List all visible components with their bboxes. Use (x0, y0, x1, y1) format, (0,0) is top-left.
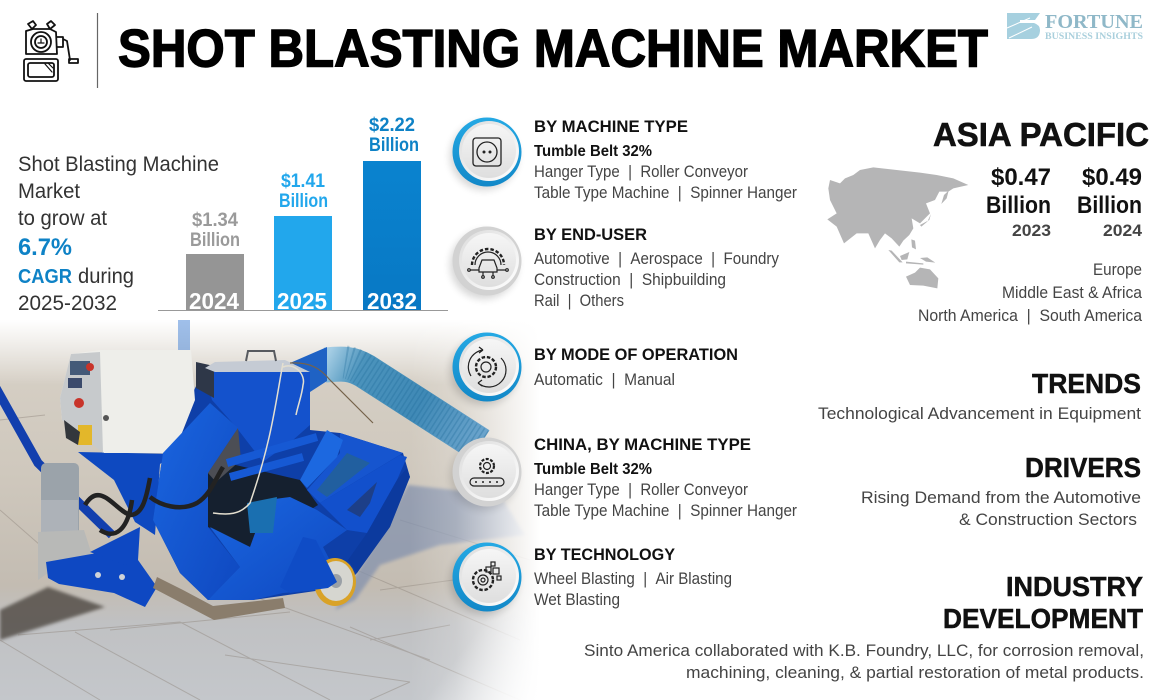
machine handle (0, 388, 112, 535)
icon: by machine type (450, 118, 522, 190)
machine body backing (153, 368, 410, 600)
carry handle (246, 351, 276, 361)
other regions list (918, 261, 1143, 325)
text: by machine type: Hanger Type | Roller Conveyor (534, 163, 748, 181)
vertical pole (178, 320, 190, 354)
value 2024 (1077, 164, 1143, 240)
text: by mode of operation (534, 345, 738, 389)
bar 2025: 2025 (277, 288, 327, 314)
other regions list: Europe (1093, 261, 1142, 279)
logo: Fortune Business Insights: BUSINESS INSIGHTS (1045, 32, 1143, 42)
bar 2025: $1.41 (281, 171, 325, 192)
bar chart (158, 115, 448, 314)
photo: shot blasting machine on paving (0, 320, 540, 700)
bar 2032 (363, 115, 421, 314)
text: by technology: Wheel Blasting | Air Blasting (534, 570, 732, 588)
bar 2024: $1.34 (192, 210, 238, 231)
value 2024: 2024 (1103, 222, 1143, 240)
electric motor (38, 463, 92, 580)
dark interior (208, 463, 318, 547)
bar 2032: $2.22 (369, 115, 415, 136)
text: by end-user: Automotive | Aerospace | Foundry (534, 250, 780, 268)
bar 2032: Billion (369, 135, 419, 156)
hopper (203, 368, 310, 462)
CAGR text block: CAGR (18, 266, 73, 288)
other regions list: North America | South America (918, 307, 1143, 325)
industry development: INDUSTRY (1006, 571, 1143, 602)
CAGR text block: to grow at (18, 207, 107, 230)
trends: TRENDS (1032, 368, 1141, 399)
industry development: DEVELOPMENT (943, 603, 1143, 634)
control box (60, 350, 195, 453)
logo: Fortune Business Insights: FORTUNE (1045, 11, 1143, 33)
text: china by machine type: Table Type Machine | Spinner Hanger (534, 502, 797, 520)
value 2024: $0.49 (1082, 164, 1142, 191)
lower body (208, 497, 347, 600)
text: by machine type (534, 117, 797, 202)
bar 2025: Billion (279, 191, 328, 212)
C-frame (153, 403, 240, 600)
icon: china by machine type (450, 438, 522, 510)
text: by machine type: BY MACHINE TYPE (534, 117, 688, 136)
CAGR text block: Market (18, 180, 80, 203)
icon: by end-user (450, 226, 522, 299)
heading: Asia Pacific: ASIA PACIFIC (933, 117, 1149, 154)
CAGR text block: 6.7% (18, 234, 72, 261)
top cover (300, 430, 343, 488)
rear guard (46, 553, 157, 607)
bar 2024: 2024 (189, 288, 239, 314)
CAGR text block: during (78, 265, 134, 288)
header icon: shot blasting machine (24, 21, 78, 81)
tubes and cables (85, 363, 373, 534)
wheel arm (280, 537, 337, 593)
Asia Pacific values (986, 164, 1143, 240)
text: by end-user: Construction | Shipbuilding (534, 271, 726, 289)
bar 2024 (186, 210, 244, 314)
text: by mode of operation: BY MODE OF OPERATION (534, 345, 738, 364)
industry development: Sinto America collaborated with K.B. Foundry, LLC, for corrosion removal, (584, 641, 1144, 660)
text: by end-user: BY END-USER (534, 225, 647, 244)
value 2023 (986, 164, 1051, 240)
text: by end-user: Rail | Others (534, 292, 624, 310)
hose joint (290, 347, 327, 392)
other regions list: Middle East & Africa (1002, 284, 1143, 302)
text: by end-user (534, 225, 780, 310)
logo: Fortune Business Insights (1007, 11, 1143, 42)
text: by machine type: Table Type Machine | Spinner Hanger (534, 184, 797, 202)
bar 2032: 2032 (367, 288, 417, 314)
trends (818, 368, 1141, 423)
text: china by machine type: CHINA, BY MACHINE TYPE (534, 435, 751, 454)
ground shadow right (335, 485, 525, 610)
ground shadow left (0, 587, 105, 640)
text: china by machine type (534, 435, 797, 520)
text: by technology: BY TECHNOLOGY (534, 545, 676, 564)
drivers (861, 452, 1141, 529)
trends: Technological Advancement in Equipment (818, 404, 1141, 423)
map: Asia Pacific (827, 167, 968, 288)
icon: by mode of operation (450, 332, 522, 405)
icon: by technology (450, 542, 522, 615)
drivers: DRIVERS (1025, 452, 1141, 483)
header divider (96, 13, 98, 88)
title: SHOT BLASTING MACHINE MARKET (118, 20, 988, 78)
value 2023: Billion (986, 192, 1051, 219)
value 2023: 2023 (1012, 222, 1051, 240)
text: by technology: Wet Blasting (534, 591, 620, 609)
text: by technology (534, 545, 732, 609)
industry development: machining, cleaning, & partial restoration of metal products. (686, 663, 1144, 682)
CAGR text block: Shot Blasting Machine (18, 153, 219, 176)
deck (78, 452, 175, 535)
yellow wheel (314, 558, 356, 606)
text: by mode of operation: Automatic | Manual (534, 371, 675, 389)
text: china by machine type: Hanger Type | Roller Conveyor (534, 481, 748, 499)
drivers: Rising Demand from the Automotive (861, 488, 1141, 507)
drivers: & Construction Sectors (959, 510, 1137, 529)
text: by machine type: Tumble Belt 32% (534, 143, 652, 160)
CAGR text block: 2025-2032 (18, 292, 117, 315)
base plate (153, 577, 285, 620)
value 2024: Billion (1077, 192, 1142, 219)
industry development (584, 571, 1144, 682)
CAGR text block (18, 153, 219, 315)
bar 2024: Billion (190, 230, 240, 251)
bar 2025 (274, 171, 332, 314)
right frame (320, 455, 407, 533)
value 2023: $0.47 (991, 164, 1051, 191)
text: china by machine type: Tumble Belt 32% (534, 461, 652, 478)
hose (325, 362, 480, 445)
motor housing (307, 433, 403, 503)
